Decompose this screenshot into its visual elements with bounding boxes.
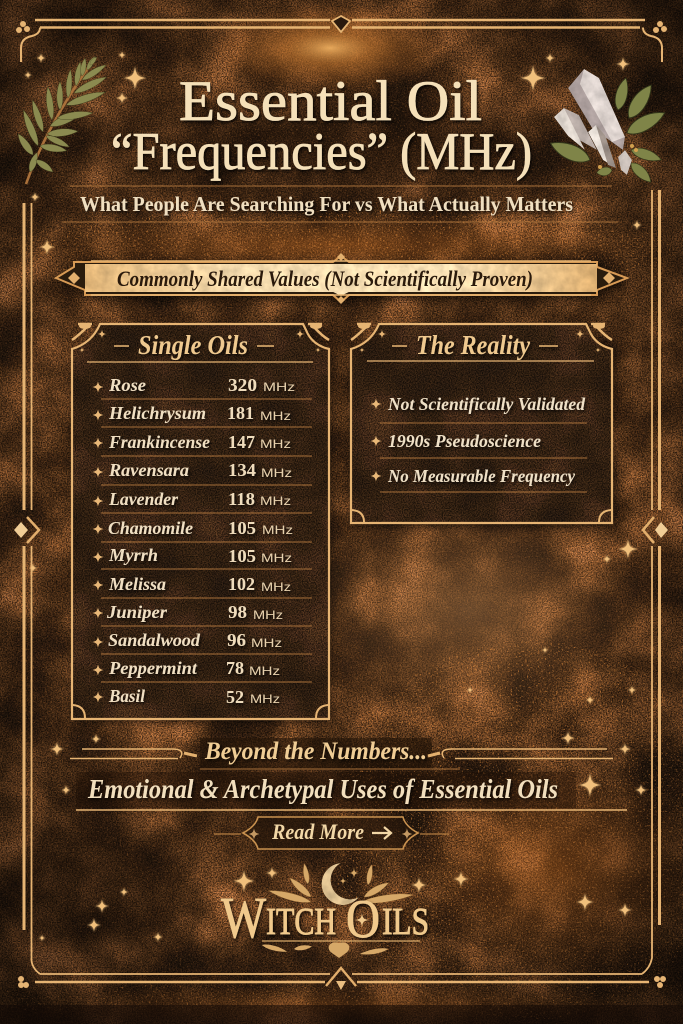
- oil list: Lavender: [108, 489, 179, 509]
- oil list: 105: [228, 546, 256, 566]
- oil list: MHz: [261, 580, 291, 594]
- icon: crescent moon: [322, 863, 359, 905]
- oil list: Juniper: [106, 602, 168, 622]
- logo flourish: [261, 941, 420, 958]
- oil list: Helichrysum: [108, 403, 206, 423]
- logo: witch oils: W: [221, 885, 266, 950]
- ornament: right diamond: [643, 517, 668, 543]
- oil list: MHz: [261, 466, 292, 480]
- sparkles: [24, 51, 647, 942]
- oil list: Basil: [108, 686, 145, 706]
- oil list: [106, 375, 295, 707]
- logo: witch oils: O: [346, 889, 380, 949]
- oil list: MHz: [260, 437, 291, 451]
- banner: commonly shared values: Commonly Shared Values (Not Scientifically Proven): [117, 266, 533, 291]
- oil list: 96: [227, 630, 246, 650]
- title: “Frequencies” (MHz): [111, 123, 532, 181]
- panel: the reality: [349, 322, 614, 526]
- oil list: 134: [228, 460, 256, 480]
- oil list: 147: [228, 432, 255, 452]
- reality list: No Measurable Frequency: [387, 466, 576, 486]
- oil list: 118: [228, 489, 255, 509]
- heading: single oils: Single Oils: [138, 330, 248, 360]
- oil list: 78: [226, 658, 244, 678]
- logo: witch oils: ITCH: [266, 901, 336, 943]
- oil list: Ravensara: [108, 460, 189, 480]
- logo: witch oils: ILS: [382, 901, 429, 943]
- reality list: [370, 394, 587, 492]
- beyond the numbers heading: Beyond the Numbers...: [204, 738, 427, 765]
- beyond the numbers heading: [70, 738, 613, 770]
- emotional and archetypal uses: Emotional & Archetypal Uses of Essential Oils: [87, 774, 558, 804]
- oil list: 102: [228, 574, 255, 594]
- title: [111, 70, 532, 181]
- oil list: 98: [228, 602, 247, 622]
- ornament: top center: [332, 16, 350, 32]
- oil list: MHz: [249, 664, 280, 678]
- oil list: MHz: [263, 380, 295, 394]
- oil list: MHz: [260, 409, 291, 423]
- ornament: left diamond: [14, 517, 39, 543]
- oil list: Sandalwood: [108, 630, 201, 650]
- oil list: MHz: [261, 551, 292, 565]
- icon: rosemary sprig: [15, 55, 108, 184]
- oil list: Peppermint: [108, 658, 198, 678]
- oil list: Melissa: [108, 574, 166, 594]
- reality list: 1990s Pseudoscience: [388, 431, 541, 451]
- oil list: Frankincense: [108, 432, 210, 452]
- heading: the reality: The Reality: [416, 330, 531, 360]
- panel: single oils: [70, 322, 332, 722]
- icon: arrow: [372, 827, 391, 839]
- oil list: MHz: [253, 608, 283, 622]
- read more button: [214, 817, 449, 849]
- subtitle: What People Are Searching For vs What Actually Matters: [80, 192, 573, 216]
- title: Essential Oil: [179, 70, 482, 133]
- ornament: bottom center: [326, 968, 356, 990]
- oil list: Chamomile: [108, 518, 193, 538]
- oil list: MHz: [260, 494, 291, 508]
- logo: witch oils: [221, 863, 429, 958]
- banner: commonly shared values: [56, 253, 627, 304]
- subtitle: [62, 186, 618, 222]
- oil list: 181: [227, 403, 254, 423]
- oil list: Rose: [108, 375, 146, 395]
- oil list: MHz: [262, 523, 293, 537]
- read more button: Read More: [271, 819, 364, 844]
- oil list: 320: [228, 375, 257, 395]
- icon: crystals and leaves: [547, 69, 668, 186]
- oil list: Myrrh: [108, 545, 158, 565]
- logo laurels: [267, 863, 414, 906]
- oil list: MHz: [251, 636, 282, 650]
- reality list: Not Scientifically Validated: [387, 394, 586, 414]
- oil list: 52: [226, 687, 244, 707]
- oil list: 105: [228, 518, 256, 538]
- oil list: MHz: [250, 692, 280, 706]
- row dividers and star bullets: [92, 382, 312, 702]
